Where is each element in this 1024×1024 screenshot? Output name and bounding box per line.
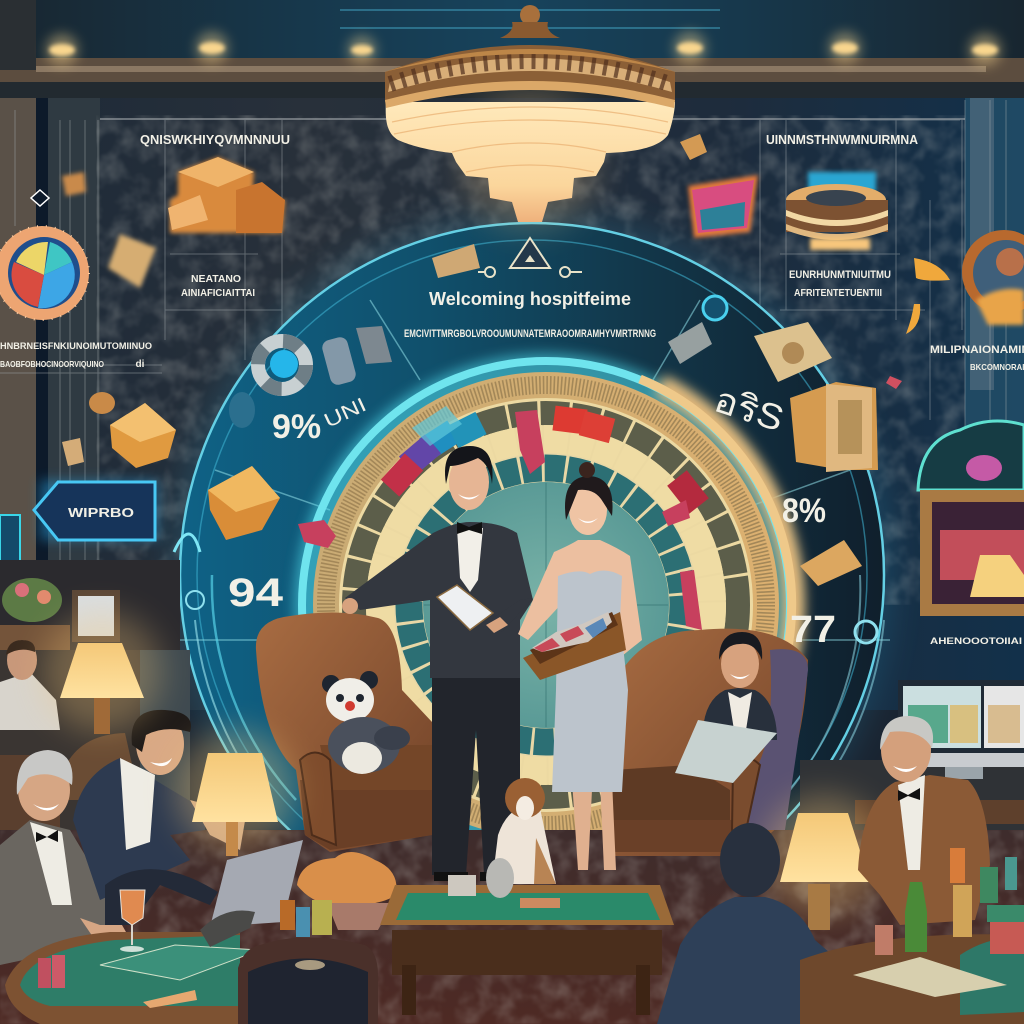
disc numbers: 94 [228, 571, 284, 615]
title text: EMCIVITTMRGBOLVROOUMUNNATEMRAOOMRAMHYVMRTRNNG [404, 328, 656, 340]
left grey-haired man [0, 750, 126, 965]
orange boxes icon [168, 157, 285, 233]
host man [342, 446, 533, 881]
stacked chips icon [786, 172, 888, 250]
right neon arch and framed screen: AHENOOOTOIIAI [930, 636, 1022, 646]
disc numbers: 77 [790, 609, 836, 651]
neon arrow sign [0, 480, 158, 583]
neon tablet icon [688, 175, 758, 238]
roulette wheel [294, 353, 798, 857]
left stat text: di [136, 359, 145, 370]
disc numbers: อริS [710, 379, 789, 439]
left wall furnishings [0, 560, 180, 650]
left card table [5, 890, 260, 1024]
host woman [518, 462, 642, 870]
seated small man [675, 632, 777, 783]
left small card icons [31, 172, 156, 288]
chandelier [384, 5, 676, 230]
right section heading: UINNMSTHNWMNUIRMNA [766, 132, 919, 147]
title text [404, 289, 656, 340]
left armchair [256, 612, 432, 852]
large holographic disc [170, 213, 894, 937]
pie chart [0, 226, 89, 320]
right panel caption [789, 269, 891, 299]
gauge dial with gold [906, 230, 1024, 334]
floating card icons on disc [356, 134, 902, 586]
left panel caption: NEATANO [191, 274, 241, 285]
far-right stat text [930, 344, 1024, 372]
right armchair [602, 629, 808, 856]
dark chair back [238, 938, 378, 1024]
left panel caption: AINIAFICIAITTAI [181, 288, 255, 299]
neon arrow sign: WIPRBO [68, 505, 134, 520]
table lamps [42, 612, 884, 930]
second laughing man [73, 710, 246, 925]
gold dice left [62, 392, 280, 552]
disc numbers: 8% [782, 492, 826, 530]
left stat text: BAOBFOBHOCINOORVIQUINO [0, 359, 104, 369]
right panel caption: EUNRHUNMTNIUITMU [789, 269, 891, 281]
top-centre icon [478, 238, 582, 277]
disc numbers: 9% [272, 408, 321, 446]
person seen from behind [657, 823, 852, 1024]
disc numbers: UNI [321, 394, 370, 433]
left section heading: QNISWKHIYQVMNNNUU [140, 132, 290, 147]
panda toy [322, 671, 410, 774]
left stat text: HNBRNEISFNKIUNOIMUTOMIINUO [0, 341, 152, 352]
ring chip icon [229, 335, 358, 428]
right card table with chips [800, 848, 1024, 1024]
left stat text [0, 341, 152, 370]
central pool table [380, 858, 674, 1015]
right neon arch and framed screen [918, 421, 1024, 646]
ceiling spotlights [46, 32, 1001, 66]
left panel caption [181, 274, 255, 299]
title text: Welcoming hospitfeime [429, 289, 631, 309]
far-right stat text: MILIPNAIONAMIN [930, 344, 1024, 356]
floating red chips on wheel [298, 410, 702, 630]
left bartender [0, 640, 60, 730]
laptop and food bowl [210, 840, 397, 937]
dog [492, 778, 556, 884]
right older man [858, 716, 990, 925]
lower room background [0, 650, 1024, 1024]
right computer monitor [898, 680, 1024, 779]
wall panel lines [0, 100, 1006, 600]
disc numbers [186, 379, 877, 651]
right panel caption: AFRITENTETUENTIII [794, 288, 882, 299]
